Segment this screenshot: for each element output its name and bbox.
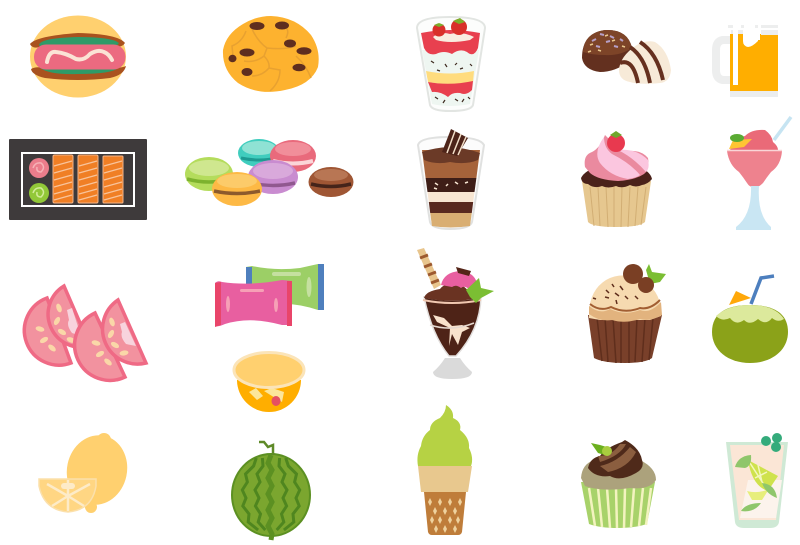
macaron: green	[185, 157, 233, 191]
icon: mojito	[726, 433, 788, 528]
macaron: brown	[308, 167, 354, 197]
icon: fruit jelly cup	[234, 352, 304, 412]
icon: matcha soft serve cone	[417, 405, 472, 535]
icon: chocolate cupcake with truffles	[588, 264, 666, 363]
icon: burger	[30, 16, 126, 98]
icon: chocolate truffles	[582, 30, 671, 84]
macaron: orange	[212, 172, 262, 206]
icon: chocolate sundae	[417, 248, 494, 379]
icon: guava slices	[24, 286, 146, 380]
macaron: purple	[248, 160, 298, 194]
slices: right pair	[75, 300, 146, 380]
icon: matcha cupcake	[581, 440, 656, 528]
icon: chocolate chip cookie	[223, 16, 319, 92]
icon: watermelon	[232, 442, 310, 540]
icon: lemon and slice	[39, 430, 134, 513]
icon: slushie cocktail	[727, 117, 791, 230]
icon: macarons	[185, 139, 354, 206]
icon: chocolate parfait	[418, 129, 484, 229]
slices: left pair	[24, 286, 90, 365]
icon: wrapped candies	[215, 264, 324, 327]
icon: pink cupcake	[581, 131, 652, 227]
icon: sushi box	[9, 139, 147, 220]
icon: strawberry parfait	[417, 17, 485, 111]
icon: coconut drink	[712, 276, 788, 363]
macaron: pink	[270, 140, 316, 172]
macaron: teal	[238, 139, 280, 167]
icon: beer mug	[712, 24, 778, 97]
